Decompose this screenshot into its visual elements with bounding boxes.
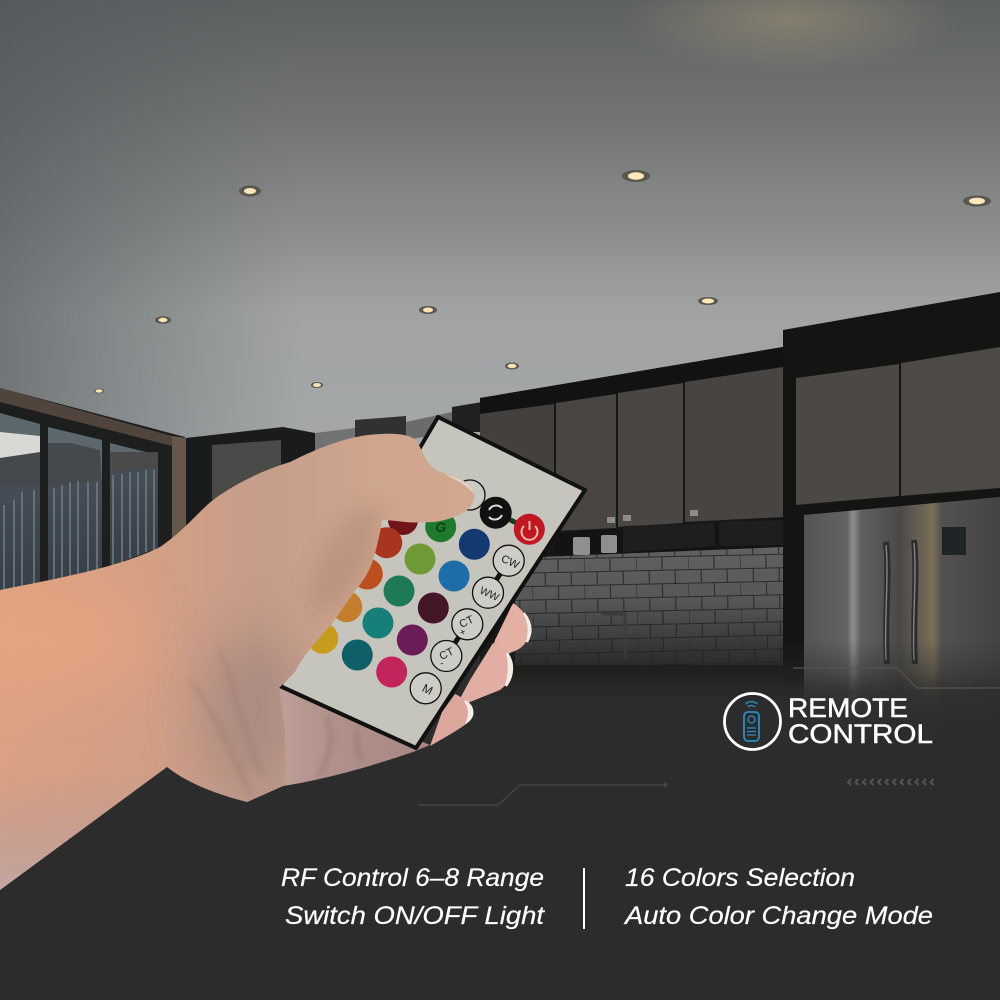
control buttons: WW (478, 585, 501, 604)
fridge display (942, 527, 966, 555)
upper kitchen cabinets (480, 347, 783, 535)
circuit line upper (793, 668, 1000, 688)
tall cabinet panels (796, 347, 1000, 505)
colour buttons: G (435, 519, 446, 535)
fingers behind remote (430, 603, 531, 746)
lower palm behind remote (247, 680, 430, 802)
heading: remote control: CONTROL (788, 719, 933, 749)
left window wall (0, 388, 187, 600)
control buttons: CT (458, 614, 476, 631)
control buttons: CW (499, 553, 521, 572)
faucet (601, 614, 625, 660)
feature text: right column (623, 864, 933, 930)
feature text: left column: RF Control 6–8 Range (281, 864, 544, 892)
remote body (280, 417, 585, 748)
divider (583, 868, 585, 929)
fridge handles (886, 540, 915, 664)
circuit line lower (418, 782, 668, 805)
control buttons: - (438, 658, 446, 669)
control buttons: M (420, 681, 435, 698)
tall unit frame (783, 292, 1000, 700)
dark lower band (0, 640, 1000, 1000)
feature text: left column (281, 864, 545, 930)
feature text: right column: 16 Colors Selection (625, 864, 855, 892)
feature text: left column: Switch ON/OFF Light (285, 902, 545, 930)
ceiling (0, 0, 1000, 445)
control buttons (410, 480, 545, 704)
back wall units (186, 402, 482, 540)
chevron row (848, 779, 934, 785)
open shelf with mugs (555, 518, 783, 556)
control buttons: CT (438, 646, 456, 663)
remote control (280, 417, 585, 748)
colour buttons (307, 505, 490, 688)
subway tile backsplash (515, 547, 783, 665)
window panes (0, 413, 158, 592)
logo: remote control icon (724, 694, 780, 750)
control buttons: + (458, 626, 468, 639)
refrigerator (804, 497, 1000, 740)
kitchen wall backdrop (480, 347, 783, 700)
ceiling lights (94, 170, 991, 394)
heading: remote control (788, 693, 933, 749)
heading: remote control: REMOTE (788, 693, 908, 723)
hand and arm (0, 430, 480, 900)
feature text: right column: Auto Color Change Mode (623, 902, 933, 930)
